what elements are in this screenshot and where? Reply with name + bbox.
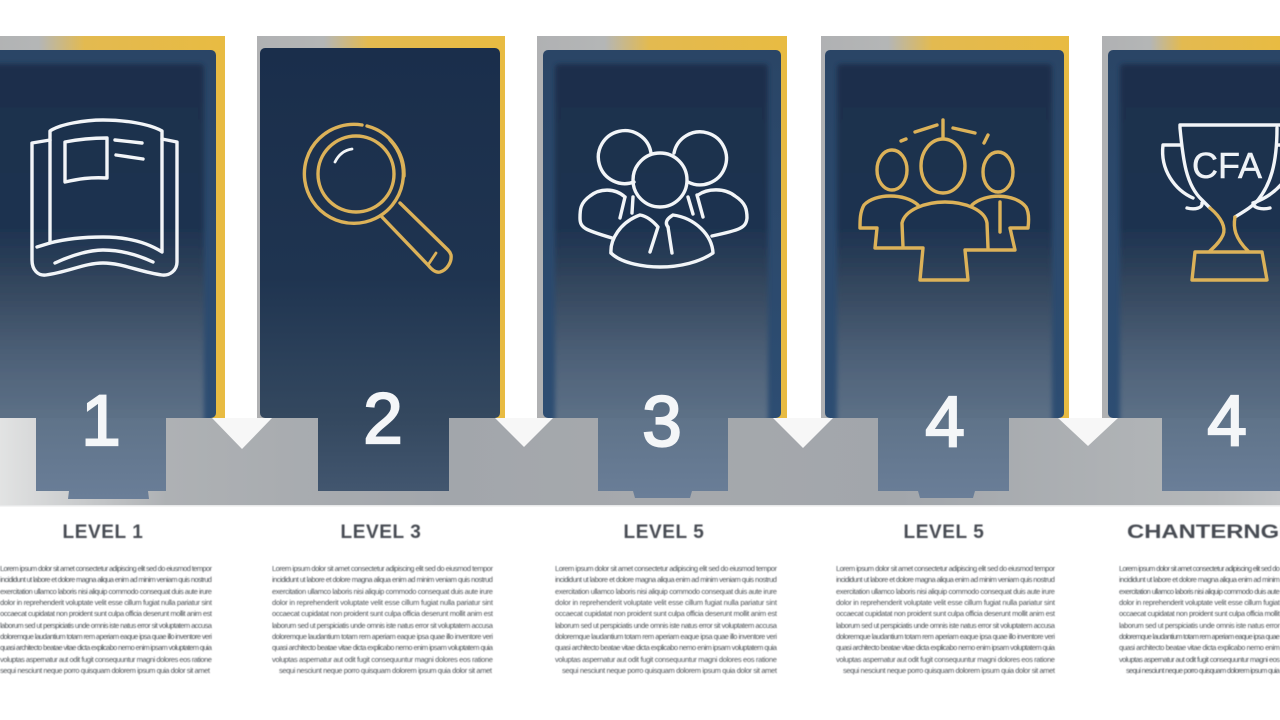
arrow 2 xyxy=(495,418,553,447)
text block 5: incididunt ut labore et dolore magna aliqua enim ad minim xyxy=(1119,575,1280,584)
text block 4: incididunt ut labore et dolore magna aliqua enim ad minim veniam quis nostrud xyxy=(836,575,1055,584)
icon: team with gold outline xyxy=(860,120,1029,280)
text block 5: sequi nesciunt neque porro quisquam dolorem ipsum quia xyxy=(1126,666,1280,675)
text block 2: exercitation ullamco laboris nisi aliquip commodo consequat duis aute irure xyxy=(272,587,493,596)
text block 1: occaecat cupidatat non proident sunt culpa officia deserunt mollit anim est xyxy=(0,609,213,618)
number tab 5: 4 xyxy=(1207,382,1247,461)
text block 5: exercitation ullamco laboris nisi aliquip commodo duis aute xyxy=(1119,587,1280,596)
text block 2: doloremque laudantium totam rem aperiam eaque ipsa quae illo inventore veri xyxy=(272,632,493,641)
text block 4: occaecat cupidatat non proident sunt culpa officia deserunt mollit anim est xyxy=(836,609,1056,618)
text block 2: laborum sed ut perspiciatis unde omnis iste natus error sit voluptatem accusa xyxy=(272,621,494,630)
text block 5 xyxy=(1119,564,1280,675)
text block 5: occaecat cupidatat non proident sunt culpa officia mollit xyxy=(1119,609,1280,618)
panel: step 1 xyxy=(0,36,225,428)
number tab 4: 4 xyxy=(925,383,965,462)
number tab 4 xyxy=(878,383,1009,498)
number tab 5 xyxy=(1162,382,1280,491)
panel: step 3 xyxy=(537,36,787,428)
text block 2: dolor in reprehenderit voluptate velit esse cillum fugiat nulla pariatur sint xyxy=(272,598,494,607)
text block 5: voluptas aspernatur aut odit fugit consequuntur magni eos xyxy=(1119,655,1280,664)
arrow 4 xyxy=(1058,418,1118,446)
text block 2: voluptas aspernatur aut odit fugit consequuntur magni dolores eos ratione xyxy=(272,655,493,664)
text block 3 xyxy=(555,564,778,675)
text block 2 xyxy=(272,564,494,675)
text block 3: quasi architecto beatae vitae dicta explicabo nemo enim ipsam voluptatem quia xyxy=(555,643,778,652)
text block 4: dolor in reprehenderit voluptate velit esse cillum fugiat nulla pariatur sint xyxy=(836,598,1056,607)
text block 3: dolor in reprehenderit voluptate velit esse cillum fugiat nulla pariatur sint xyxy=(555,598,778,607)
text block 4: doloremque laudantium totam rem aperiam eaque ipsa quae illo inventore veri xyxy=(836,632,1055,641)
text block 2: sequi nesciunt neque porro quisquam dolorem ipsum quia dolor sit amet xyxy=(279,666,493,675)
text block 1: dolor in reprehenderit voluptate velit esse cillum fugiat nulla pariatur sint xyxy=(0,598,213,607)
panel: step 5 xyxy=(1102,36,1280,428)
heading: level 1: LEVEL 1 xyxy=(63,522,143,543)
text block 4: quasi architecto beatae vitae dicta explicabo nemo enim ipsam voluptatem quia xyxy=(836,643,1056,652)
panel: step 4 xyxy=(821,36,1069,428)
text block 2: quasi architecto beatae vitae dicta explicabo nemo enim ipsam voluptatem quia xyxy=(272,643,494,652)
text block 3: sequi nesciunt neque porro quisquam dolorem ipsum quia dolor sit amet xyxy=(562,666,778,675)
icon: open book xyxy=(32,120,177,275)
heading: level 3: LEVEL 5 xyxy=(624,522,704,543)
number tab 1 xyxy=(36,382,166,499)
text block 3: Lorem ipsum dolor sit amet consectetur adipiscing elit sed do eiusmod tempor xyxy=(555,564,777,573)
connector band xyxy=(0,418,1280,506)
text block 2: incididunt ut labore et dolore magna aliqua enim ad minim veniam quis nostrud xyxy=(272,575,493,584)
text block 1: voluptas aspernatur aut odit fugit consequuntur magni dolores eos ratione xyxy=(0,655,212,664)
text block 5: dolor in reprehenderit voluptate velit esse cillum fugiat xyxy=(1119,598,1280,607)
text block 5: doloremque laudantium totam rem aperiam eaque ipsa quae xyxy=(1119,632,1280,641)
text block 3: incididunt ut labore et dolore magna aliqua enim ad minim veniam quis nostrud xyxy=(555,575,777,584)
text block 5: laborum sed ut perspiciatis unde omnis iste natus error xyxy=(1119,621,1280,630)
icon: CFA trophy: CFA xyxy=(1192,145,1262,186)
text block 3: exercitation ullamco laboris nisi aliquip commodo consequat duis aute irure xyxy=(555,587,777,596)
text block 2: Lorem ipsum dolor sit amet consectetur adipiscing elit sed do eiusmod tempor xyxy=(272,564,493,573)
arrow 3 xyxy=(773,418,833,448)
number tab 3: 3 xyxy=(642,383,682,462)
text block 1: laborum sed ut perspiciatis unde omnis iste natus error sit voluptatem accusa xyxy=(0,621,213,630)
text block 3: voluptas aspernatur aut odit fugit consequuntur magni dolores eos ratione xyxy=(555,655,777,664)
text block 2: occaecat cupidatat non proident sunt culpa officia deserunt mollit anim est xyxy=(272,609,494,618)
arrow 1 xyxy=(212,418,272,449)
text block 4: sequi nesciunt neque porro quisquam dolorem ipsum quia dolor sit amet xyxy=(843,666,1056,675)
icon: CFA trophy xyxy=(1163,125,1280,280)
heading: level 4: LEVEL 5 xyxy=(904,522,984,543)
text block 1: incididunt ut labore et dolore magna aliqua enim ad minim veniam quis nostrud xyxy=(0,575,212,584)
text block 1: exercitation ullamco laboris nisi aliquip commodo consequat duis aute irure xyxy=(0,587,212,596)
number tab 1: 1 xyxy=(81,382,121,461)
text block 1: Lorem ipsum dolor sit amet consectetur adipiscing elit sed do eiusmod tempor xyxy=(0,564,212,573)
panel: step 2 xyxy=(257,36,505,418)
text block 1: quasi architecto beatae vitae dicta explicabo nemo enim ipsam voluptatem quia xyxy=(0,643,213,652)
heading: challenge: CHANTERNGE xyxy=(1127,522,1280,543)
heading: level 2: LEVEL 3 xyxy=(341,522,421,543)
icon: magnifying glass xyxy=(304,124,451,272)
text block 4: exercitation ullamco laboris nisi aliquip commodo consequat duis aute irure xyxy=(836,587,1055,596)
text block 3: occaecat cupidatat non proident sunt culpa officia deserunt mollit anim est xyxy=(555,609,778,618)
number tab 2 xyxy=(318,380,449,491)
text block 5: Lorem ipsum dolor sit amet consectetur adipiscing elit sed do xyxy=(1119,564,1280,573)
number tab 2: 2 xyxy=(363,380,403,459)
text block 4: laborum sed ut perspiciatis unde omnis iste natus error sit voluptatem accusa xyxy=(836,621,1056,630)
text block 4 xyxy=(836,564,1056,675)
icon: group of people xyxy=(580,131,747,267)
text block 1: doloremque laudantium totam rem aperiam eaque ipsa quae illo inventore veri xyxy=(0,632,212,641)
text block 1: sequi nesciunt neque porro quisquam dolorem ipsum quia dolor sit amet xyxy=(0,666,211,675)
text block 1 xyxy=(0,564,213,675)
text block 3: laborum sed ut perspiciatis unde omnis iste natus error sit voluptatem accusa xyxy=(555,621,778,630)
number tab 3 xyxy=(598,383,728,498)
text block 5: quasi architecto beatae vitae dicta explicabo nemo enim xyxy=(1119,643,1280,652)
text block 4: voluptas aspernatur aut odit fugit consequuntur magni dolores eos ratione xyxy=(836,655,1055,664)
text block 4: Lorem ipsum dolor sit amet consectetur adipiscing elit sed do eiusmod tempor xyxy=(836,564,1055,573)
text block 3: doloremque laudantium totam rem aperiam eaque ipsa quae illo inventore veri xyxy=(555,632,777,641)
